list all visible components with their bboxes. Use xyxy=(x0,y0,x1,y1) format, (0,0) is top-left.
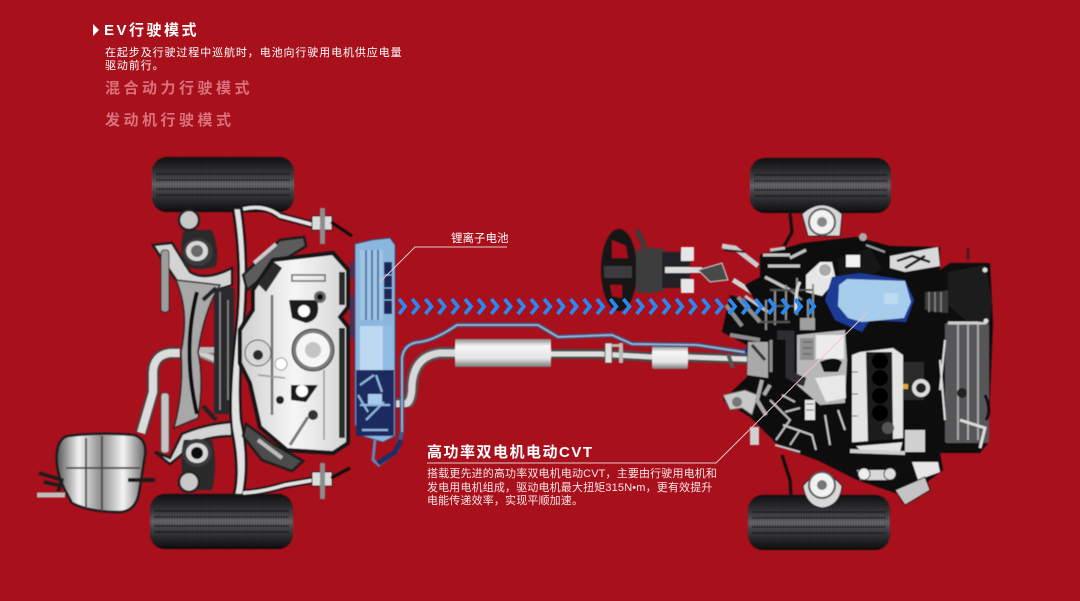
air box and intake boot xyxy=(925,248,992,324)
leader line: CVT xyxy=(427,312,868,463)
radiator xyxy=(940,323,989,448)
text: CVT description: 电能传递效率，实现平顺加速。 xyxy=(427,495,583,507)
heading: CVT: 高功率双电机电动CVT xyxy=(427,444,594,461)
lithium-ion battery pack xyxy=(352,238,395,466)
text: CVT description: 搭载更先进的高功率双电机电动CVT，主要由行驶用电机和 xyxy=(427,468,717,480)
text: EV mode description xyxy=(105,46,402,72)
cooling hose xyxy=(378,325,772,463)
fuel tank xyxy=(240,253,348,453)
blue flow arrows xyxy=(399,299,814,314)
steering wheel and column xyxy=(601,229,758,311)
lower engine bay details xyxy=(723,380,940,505)
heading: engine mode: 发动机行驶模式 xyxy=(105,112,235,129)
engine block and coils xyxy=(850,348,930,453)
engine bay assembly xyxy=(722,205,993,508)
text: EV mode description: 驱动前行。 xyxy=(105,60,164,72)
text: CVT description: 发电用电机组成，驱动电机最大扭矩315N•m，更有效提升 xyxy=(427,482,713,494)
mode arrow xyxy=(93,24,99,36)
mount and front-left details xyxy=(726,233,885,340)
rear knuckles and hubs xyxy=(179,210,217,492)
text: CVT description xyxy=(427,468,717,507)
label: lithium-ion battery: 锂离子电池 xyxy=(451,233,508,245)
transaxle housing xyxy=(747,330,847,405)
exhaust system: rear pipe and muffler xyxy=(37,352,222,512)
text: EV mode description: 在起步及行驶过程中巡航时，电池向行驶用电机供应电量 xyxy=(105,47,402,59)
heading: EV mode: EV行驶模式 xyxy=(104,22,199,39)
exhaust system: mid pipe, silencer and catalyst xyxy=(396,339,773,404)
tire: rear top xyxy=(152,157,294,212)
rear subframe and suspension xyxy=(153,208,352,499)
heading: hybrid mode: 混合动力行驶模式 xyxy=(105,80,253,97)
tire: front top xyxy=(750,158,891,213)
tire: rear bottom xyxy=(150,494,293,549)
front hubs xyxy=(782,205,842,508)
tire: front bottom xyxy=(748,495,890,550)
inverter housing xyxy=(825,273,914,332)
leader line: battery xyxy=(380,247,507,282)
radiator bracket xyxy=(890,247,940,272)
